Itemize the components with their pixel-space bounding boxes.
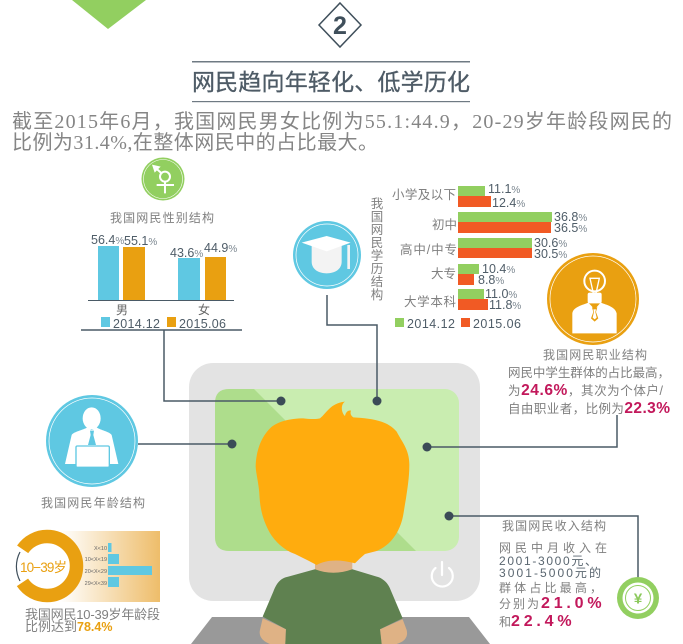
education bar chart: 初中 — [432, 217, 457, 232]
occupation text — [508, 365, 670, 417]
education bar chart: 小学及以下 — [392, 187, 456, 202]
income text: 2001-3000元、 — [499, 554, 597, 568]
power icon — [432, 562, 453, 587]
income text: 网民中月收入在 — [499, 540, 607, 555]
education bar chart: 30.5% — [534, 247, 567, 261]
gender legend: 2014.12 — [113, 317, 160, 331]
income text: 3001-5000元的 — [499, 565, 601, 580]
education bar chart: 大专 — [431, 266, 456, 281]
income text — [499, 540, 607, 630]
education bar chart: 大学本科 — [404, 294, 456, 309]
education bar chart: 11.8% — [489, 298, 521, 312]
education heading (vertical): 结 — [371, 275, 383, 289]
gender legend — [101, 317, 226, 331]
mini age bars: X<10 — [94, 546, 107, 552]
education heading (vertical) — [371, 197, 384, 302]
age chart panel — [16, 531, 160, 602]
icon: gender symbol — [142, 158, 184, 200]
education heading (vertical): 我 — [371, 197, 384, 211]
gender bar chart: 43.6% — [170, 246, 203, 260]
gender bar chart: 女 — [198, 302, 210, 317]
monitor frame — [189, 363, 480, 601]
icon: graduation cap — [293, 221, 361, 289]
education bar chart: 11.1% — [488, 182, 520, 196]
intro text — [12, 110, 672, 154]
education heading (vertical): 构 — [371, 287, 383, 302]
gender bar chart — [88, 233, 237, 317]
occupation heading: 我国网民职业结构 — [543, 347, 647, 362]
icon: person at laptop — [46, 395, 138, 487]
income text: 群体占比最高， — [499, 580, 602, 595]
education heading (vertical): 学 — [371, 248, 383, 263]
education legend — [395, 317, 521, 331]
monitor illustration — [189, 363, 490, 644]
education bar chart: 36.8% — [554, 210, 587, 224]
education legend: 2014.12 — [407, 317, 455, 331]
donut chart — [16, 536, 77, 596]
gender bar chart: 44.9% — [204, 241, 237, 255]
gender legend: 2015.06 — [179, 317, 226, 331]
title: 网民趋向年轻化、低学历化 — [192, 69, 470, 95]
section number badge — [319, 3, 361, 47]
gender bar chart: 男 — [116, 303, 128, 317]
gender bar chart: 55.1% — [124, 234, 157, 248]
education bar chart: 36.5% — [554, 221, 587, 235]
age text — [25, 607, 160, 634]
occupation text: 自由职业者，比例为22.3% — [508, 400, 670, 417]
person from behind — [256, 402, 409, 644]
intro text: 比例为31.4%,在整体网民中的占比最大。 — [12, 131, 378, 154]
education heading (vertical): 国 — [371, 210, 383, 224]
education bar chart: 高中/中专 — [400, 242, 457, 257]
icon: yuan coin — [617, 577, 659, 619]
age text: 我国网民10-39岁年龄段 — [25, 607, 160, 622]
mini age bars: 29<X<39 — [85, 581, 107, 587]
education heading (vertical): 网 — [371, 223, 383, 237]
desk — [191, 617, 490, 644]
education legend: 2015.06 — [473, 317, 521, 331]
income text: 分别为21.0% — [499, 595, 605, 612]
education heading (vertical): 历 — [371, 262, 383, 276]
occupation text: 为24.6%，其次为个体户/ — [508, 382, 664, 399]
education bar chart: 10.4% — [482, 262, 515, 276]
education bar chart — [392, 182, 587, 312]
mini age bars: 20<X<29 — [85, 569, 107, 575]
green triangle marker — [72, 0, 146, 29]
section number badge: 2 — [333, 12, 347, 40]
mini age bars: 10<X<19 — [85, 557, 107, 563]
education bar chart: 11.0% — [485, 287, 517, 301]
education bar chart: 12.4% — [492, 196, 525, 210]
donut chart: 10−39岁 — [20, 560, 67, 575]
intro text: 截至2015年6月，我国网民男女比例为55.1:44.9，20-29岁年龄段网民的 — [12, 110, 672, 133]
panel: income structure — [499, 518, 659, 630]
income text: 和22.4% — [499, 613, 575, 630]
gender heading: 我国网民性别结构 — [110, 210, 214, 225]
panel: age structure — [16, 395, 160, 634]
panel: occupation structure — [508, 253, 670, 417]
icon: lightbulb head person — [547, 253, 639, 345]
age text: 比例达到78.4% — [25, 619, 112, 634]
age heading: 我国网民年龄结构 — [41, 495, 145, 510]
gender bar chart: 56.4% — [91, 233, 124, 247]
occupation text: 网民中学生群体的占比最高， — [508, 365, 670, 380]
icon: yuan coin: ¥ — [634, 590, 643, 608]
education bar chart: 30.6% — [534, 236, 567, 250]
mini age bars — [85, 543, 152, 587]
education heading (vertical): 民 — [371, 236, 383, 250]
panel: gender structure — [88, 158, 237, 331]
monitor screen — [215, 389, 459, 551]
education bar chart: 8.8% — [478, 273, 504, 287]
connector lines with dots — [81, 295, 638, 578]
income heading: 我国网民收入结构 — [502, 518, 606, 533]
